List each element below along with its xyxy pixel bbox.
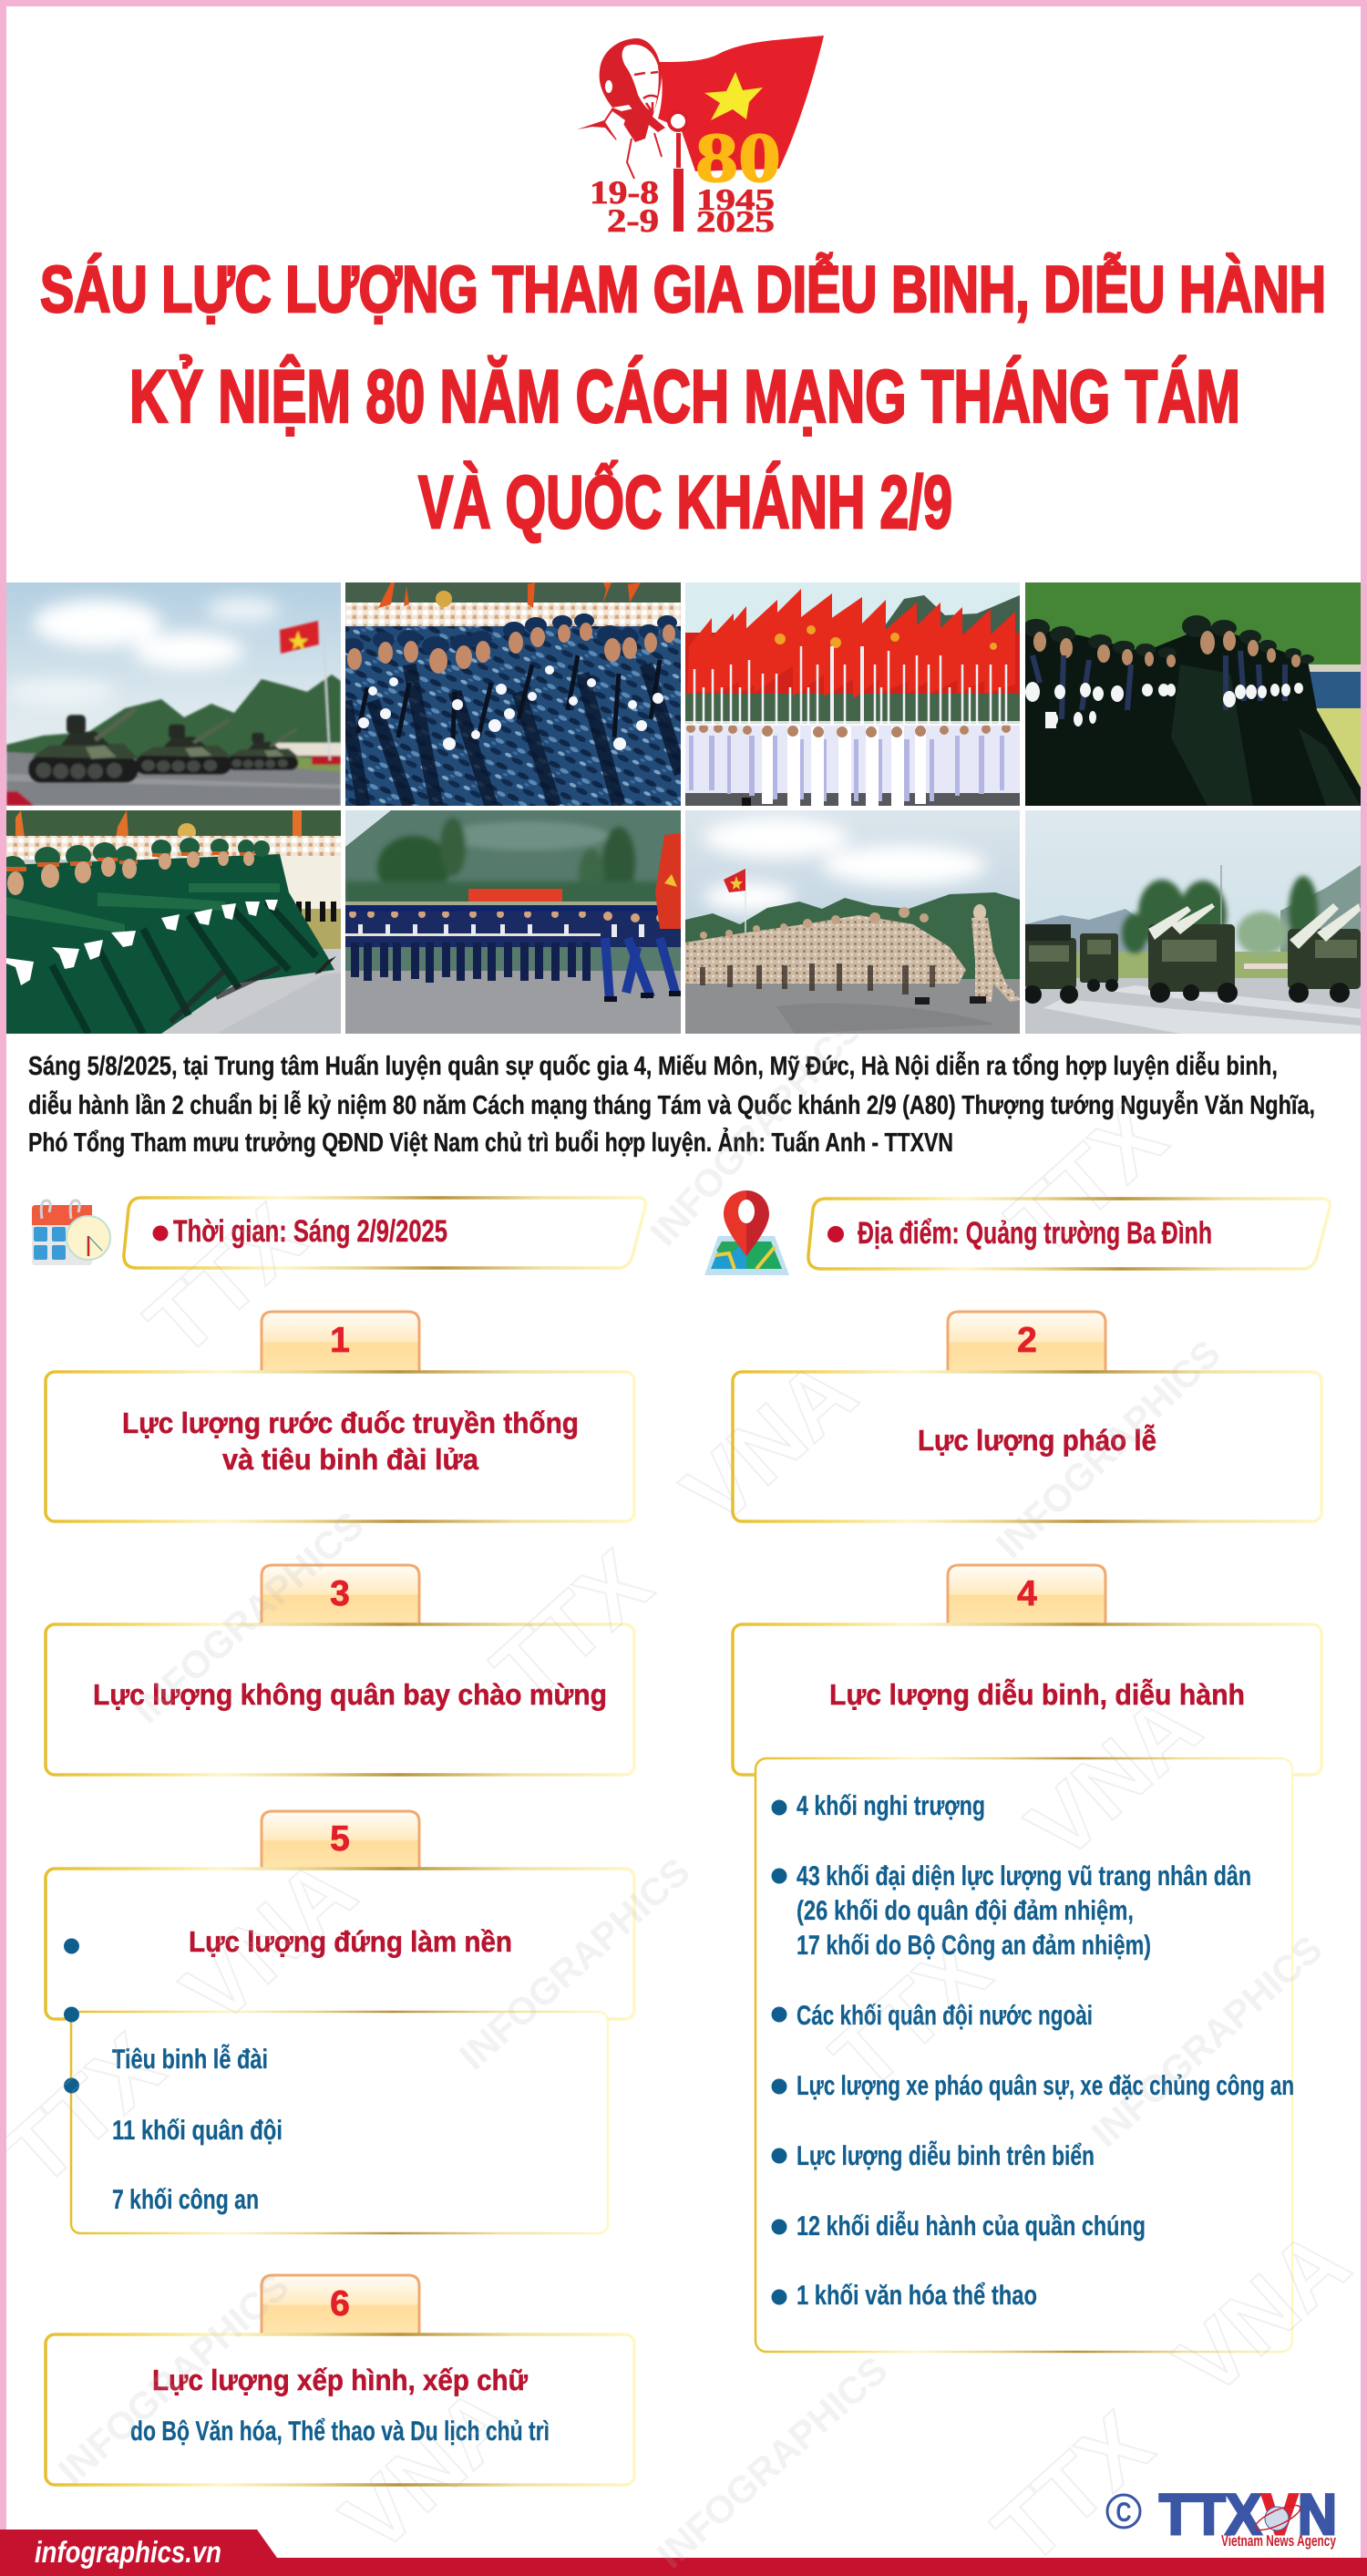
photo: marines formation <box>685 810 1020 1034</box>
watermarks: INFOGRAPHICS <box>451 1850 698 2077</box>
number tab 1 <box>262 1312 419 1372</box>
list: force 4 detail: Các khối quân đội nước ngoài <box>797 2001 1093 2031</box>
title: VÀ QUỐC KHÁNH 2/9 <box>418 460 952 544</box>
number tab 5 <box>262 1811 419 1869</box>
number tab 1: 1 <box>330 1321 350 1360</box>
list: force 5 detail: Tiêu binh lễ đài <box>112 2044 268 2075</box>
heading 1: và tiêu binh đài lửa <box>222 1443 478 1476</box>
number tab 6 <box>262 2275 419 2334</box>
panel: force 2 <box>733 1312 1321 1521</box>
photo: navy-blue formation <box>345 810 681 1034</box>
dates <box>590 174 775 239</box>
list: force 4 detail <box>755 1758 1294 2352</box>
watermarks: TTX <box>474 1531 670 1723</box>
watermarks: INFOGRAPHICS <box>642 1007 869 1254</box>
heading 4: Lực lượng diễu binh, diễu hành <box>829 1678 1245 1711</box>
dates: 2-9 <box>607 202 659 239</box>
list: force 4 detail: 43 khối đại diện lực lượng vũ trang nhân dân <box>797 1861 1251 1891</box>
photo: army marching <box>6 810 341 1034</box>
heading 1: Lực lượng rước đuốc truyền thống <box>122 1406 579 1439</box>
watermarks: VNA <box>1008 1674 1219 1880</box>
watermarks: INFOGRAPHICS <box>125 1503 372 1731</box>
text block: caption <box>28 1051 1315 1158</box>
list: force 4 detail: 12 khối diễu hành của quần chúng <box>797 2210 1146 2241</box>
title <box>40 252 1326 544</box>
icon: microphone <box>669 112 687 232</box>
heading 2: Lực lượng pháo lễ <box>918 1424 1156 1457</box>
heading 6 <box>130 2364 550 2447</box>
watermarks: VNA <box>663 1340 875 1545</box>
watermarks: TTX <box>128 1185 324 1376</box>
heading 5: Lực lượng đứng làm nền <box>189 1925 512 1958</box>
number tab 3 <box>262 1565 419 1623</box>
logo: TTXVN: TTXVN <box>1159 2483 1337 2547</box>
list: force 4 detail: 17 khối do Bộ Công an đảm nhiệm) <box>797 1931 1151 1961</box>
icon: star <box>704 72 763 120</box>
copyright mark <box>1107 2495 1140 2528</box>
watermarks <box>0 1007 1367 2576</box>
panel: force 6 <box>46 2275 634 2485</box>
icon: globe <box>1252 2500 1303 2535</box>
photo: tanks <box>6 582 341 806</box>
photo: missile trucks <box>1025 810 1361 1034</box>
dates: 2025 <box>696 206 775 239</box>
number tab 6: 6 <box>330 2284 350 2324</box>
number tab 2: 2 <box>1017 1321 1037 1360</box>
watermarks: VNA <box>163 1839 375 2044</box>
callout: time <box>124 1198 645 1268</box>
list: force 5 detail: 11 khối quân đội <box>112 2116 283 2146</box>
watermarks: INFOGRAPHICS <box>988 1332 1228 1566</box>
number tab 3: 3 <box>330 1574 350 1613</box>
number 80: 80 <box>695 118 781 197</box>
icon: flag <box>658 36 824 171</box>
icon: calendar and clock <box>32 1200 110 1265</box>
dates: 1945 <box>696 184 775 217</box>
number tab 4: 4 <box>1017 1574 1037 1613</box>
watermarks: TTX <box>989 1085 1185 1276</box>
list: force 4 detail: 1 khối văn hóa thể thao <box>797 2281 1037 2311</box>
callout: venue <box>808 1199 1330 1269</box>
icon: portrait of the leader <box>577 38 665 179</box>
number tab 4 <box>948 1565 1105 1623</box>
photo: air force marching <box>345 582 681 806</box>
watermarks: INFOGRAPHICS <box>1084 1927 1331 2155</box>
heading 6: Lực lượng xếp hình, xếp chữ <box>152 2364 529 2396</box>
watermarks: VNA <box>323 2367 534 2572</box>
watermarks: TTX <box>813 1919 1009 2110</box>
watermarks: INFOGRAPHICS <box>50 2264 297 2492</box>
footer bar <box>0 2530 1367 2576</box>
list: force 4 detail: (26 khối do quân đội đảm nhiệm, <box>797 1896 1134 1926</box>
dates: 19-8 <box>590 174 659 211</box>
copyright mark: C <box>1115 2498 1132 2528</box>
photo: flags formation <box>685 582 1020 806</box>
list: force 5 detail: 7 khối công an <box>112 2185 259 2215</box>
heading 6: do Bộ Văn hóa, Thể thao và Du lịch chủ trì <box>130 2416 550 2447</box>
panel: force 3 <box>46 1565 634 1775</box>
panel: force 1 <box>46 1312 634 1521</box>
photo: police marching <box>1025 582 1361 806</box>
panel: force 5 <box>46 1811 634 2233</box>
number tab 2 <box>948 1312 1105 1372</box>
footer bar: infographics.vn <box>35 2535 221 2569</box>
list: force 5 detail <box>64 1938 608 2233</box>
icon: map pin <box>704 1190 789 1275</box>
text block: caption: Phó Tổng Tham mưu trưởng QĐND Việt Nam chủ trì buổi hợp luyện. Ảnh: Tuấn Anh - TTXVN <box>28 1128 953 1158</box>
watermarks: INFOGRAPHICS <box>649 2348 896 2576</box>
watermarks: VNA <box>1156 2210 1367 2416</box>
callout: time: Thời gian: Sáng 2/9/2025 <box>173 1214 447 1249</box>
number tab 5: 5 <box>330 1819 350 1859</box>
heading 1 <box>122 1406 579 1476</box>
logo: 80 years emblem <box>577 36 824 239</box>
callout: venue: Địa điểm: Quảng trường Ba Đình <box>858 1216 1212 1251</box>
list: force 4 detail: 4 khối nghi trượng <box>797 1791 985 1821</box>
heading 3: Lực lượng không quân bay chào mừng <box>93 1678 607 1711</box>
list: force 4 detail: Lực lượng diễu binh trên biển <box>797 2140 1095 2171</box>
panel: force 4 <box>733 1565 1321 2352</box>
